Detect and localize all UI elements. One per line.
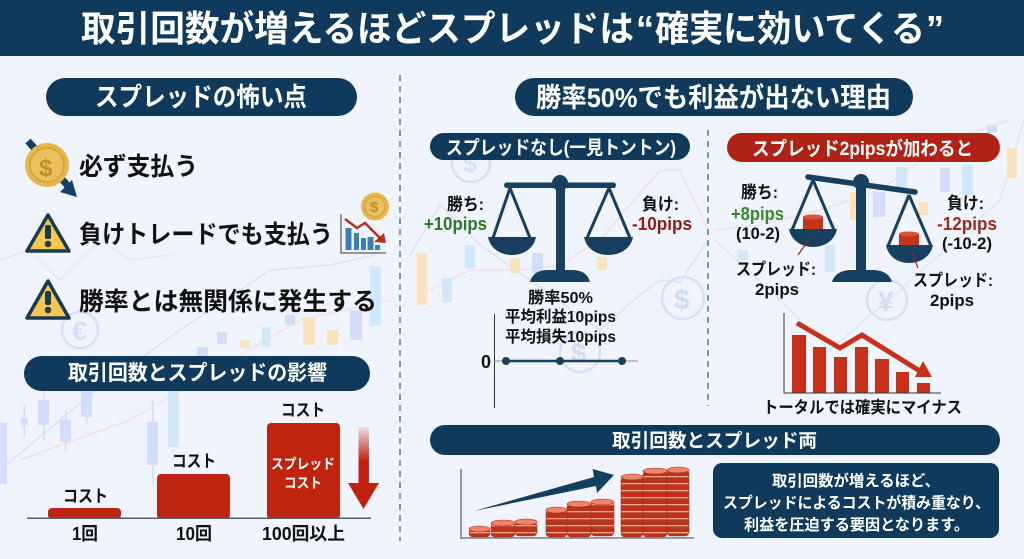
text: (-10-2): (-10-2) bbox=[942, 234, 992, 253]
heading: 取引回数とスプレッドの影響 bbox=[24, 356, 370, 391]
bar chart: cost by trade count: コスト bbox=[63, 487, 108, 506]
chart: stacked coins bbox=[461, 467, 694, 538]
icon: warning triangle bbox=[27, 281, 69, 318]
caption: トータルでは確実にマイナス bbox=[763, 398, 962, 417]
value: +10pips: +10pips bbox=[424, 214, 487, 234]
line chart: zero: 0 bbox=[481, 352, 491, 372]
label: spread right: スプレッド: bbox=[913, 271, 993, 290]
text: 必ず支払う: 必ず支払う bbox=[79, 153, 198, 181]
callout: スプレッドによるコストが積み重なり、 bbox=[723, 493, 990, 512]
bar chart: falling total bbox=[784, 313, 941, 393]
title: ” bbox=[926, 8, 944, 49]
value: +8pips: +8pips bbox=[731, 204, 784, 224]
label: 負け: 負け: bbox=[947, 194, 984, 213]
value: -10pips: -10pips bbox=[632, 214, 692, 234]
bar chart: cost by trade count: コスト bbox=[281, 401, 325, 420]
text: stats: 勝率50% bbox=[528, 289, 593, 307]
label: spread right: 2pips bbox=[930, 291, 974, 310]
heading: 取引回数とスプレッドの影響: 取引回数とスプレッドの影響 bbox=[68, 362, 327, 385]
text: 負けトレードでも支払う: 負けトレードでも支払う bbox=[79, 221, 333, 249]
panel: 取引回数とスプレッドの影響 bbox=[24, 356, 379, 544]
label: spread left bbox=[736, 260, 816, 299]
heading: 勝率50%でも利益が出ない理由: 勝率50%でも利益が出ない理由 bbox=[536, 82, 891, 113]
icon: falling chart with coin bbox=[341, 192, 389, 253]
label: spread left: スプレッド: bbox=[736, 260, 816, 279]
heading: スプレッドの怖い点: スプレッドの怖い点 bbox=[95, 82, 307, 112]
panel: スプレッドなし bbox=[424, 133, 692, 408]
sub heading: スプレッド2pips bbox=[727, 133, 1000, 162]
title: 確実に効いてくる bbox=[655, 8, 925, 49]
label: 負け: 負け: bbox=[642, 195, 679, 214]
text: 勝率とは無関係に発生する: 勝率とは無関係に発生する bbox=[79, 288, 377, 316]
bar chart: cost by trade count: コスト bbox=[172, 452, 216, 471]
background chart decoration: $ bbox=[463, 150, 477, 178]
icon: tilted scale bbox=[789, 174, 933, 282]
label: 勝ち: 勝ち: bbox=[741, 183, 778, 202]
title: 取引回数が増えるほどスプレッドは bbox=[81, 8, 634, 49]
arrow: rising cost bbox=[348, 427, 379, 509]
sub heading: スプレッドなし bbox=[430, 133, 690, 160]
label: spread left: 2pips bbox=[755, 280, 799, 299]
bar chart: cost by trade count: コスト bbox=[284, 475, 322, 491]
title: “ bbox=[636, 8, 654, 49]
background chart decoration bbox=[0, 120, 1024, 485]
bar chart: cost by trade count: スプレッド bbox=[271, 456, 335, 472]
label: 勝ち: 勝ち: bbox=[447, 195, 484, 214]
icon: coin with down arrow bbox=[25, 141, 77, 197]
background chart decoration: $ bbox=[674, 284, 690, 315]
text: stats: 平均利益10pips bbox=[505, 307, 616, 326]
panel: スプレッドの怖い点 bbox=[25, 78, 389, 318]
background chart decoration: ¥ bbox=[878, 286, 894, 317]
sub heading: スプレッドなし: スプレッドなし(一見トントン) bbox=[446, 137, 676, 159]
value: -12pips: -12pips bbox=[937, 214, 997, 234]
bar chart: cost by trade count: 10回 bbox=[176, 524, 212, 544]
panel: 取引回数とスプレッド bbox=[430, 425, 1000, 538]
text: stats: 平均損失10pips bbox=[505, 328, 616, 346]
bar chart: cost by trade count: 100回以上 bbox=[262, 524, 345, 544]
background chart decoration: € bbox=[72, 316, 87, 346]
callout: 利益を圧迫する要因となります。 bbox=[744, 516, 969, 534]
icon: balanced scale bbox=[488, 175, 633, 282]
label: spread right bbox=[913, 271, 993, 310]
icon: coin with down arrow: $ bbox=[39, 155, 53, 182]
divider bbox=[399, 75, 401, 541]
icon: falling chart with coin: $ bbox=[370, 199, 379, 216]
bar chart: cost by trade count: 1回 bbox=[72, 524, 98, 544]
text: stats bbox=[505, 289, 616, 346]
sub heading: スプレッド2pips: スプレッド2pipsが加わると bbox=[752, 137, 973, 160]
background chart decoration: $ bbox=[571, 338, 586, 368]
callout bbox=[713, 463, 999, 538]
heading: 取引回数とスプレッド bbox=[430, 425, 1000, 455]
text: (10-2): (10-2) bbox=[736, 224, 780, 243]
icon: warning triangle bbox=[27, 215, 69, 251]
heading: スプレッドの怖い点 bbox=[46, 78, 357, 116]
bar chart: cost by trade count bbox=[27, 401, 371, 544]
callout: 取引回数が増えるほど、 bbox=[772, 471, 940, 490]
title band bbox=[0, 0, 1024, 56]
line chart: zero bbox=[481, 314, 638, 408]
panel: スプレッド2pipsが加わると bbox=[727, 133, 1000, 417]
heading: 取引回数とスプレッド: 取引回数とスプレッド両 bbox=[612, 430, 817, 452]
